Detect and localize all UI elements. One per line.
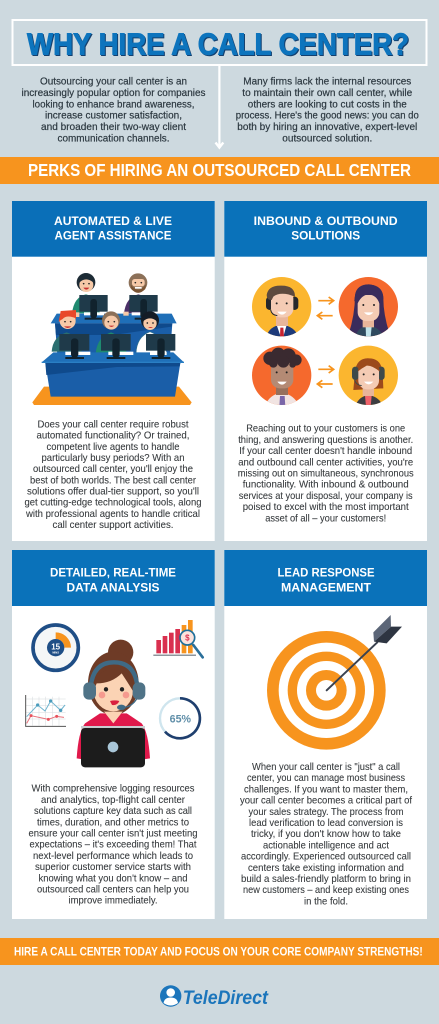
back-row agents [72,273,153,313]
avatar: man with curly hair [252,346,311,407]
back desk [51,312,177,355]
back monitors [76,295,158,320]
panel body text: expectations – it's exceeding them! That [30,839,197,851]
panel body text: and outbound call center activities, you're [238,456,413,468]
panel body text: knowing what you don't know – and [38,872,188,884]
panel body text: missing out on simultaneous, synchronous [238,468,414,480]
panel body text: thing, and answering questions is another. [238,434,413,446]
icon: bar chart with magnifier [153,620,203,657]
intro text left: communication channels. [58,132,170,144]
panel body text: in the fold. [304,895,348,907]
panel body text: improve immediately. [68,895,158,907]
panel body text: outsourced call centers can help you [37,884,189,896]
intro text right: Many firms lack the internal resources [243,76,411,88]
icon: bar chart with magnifier: $ [185,633,190,642]
panel body text: call center support activities. [52,519,174,531]
panel body text: next-level performance which leads to [33,850,193,862]
intro text left: Outsourcing your call center is an [40,76,187,88]
dart [327,615,402,690]
panel body text: superior customer service starts with [35,861,191,873]
panel heading: DETAILED, REAL-TIME [50,566,176,580]
panel body text: tricky, if you don't know how to take [251,828,401,840]
panel body text: ensure your call center isn't just meeting [28,828,198,840]
logo: TeleDirect: TeleDirect [183,987,269,1009]
agent woman with headset and laptop [77,640,150,767]
intro text left [22,76,206,144]
icon: 65 percent donut: 65% [170,713,192,725]
panel body text: solutions offer dual-tier support, so you'll [27,486,199,498]
panel body text: lead verification to lead conversion is [249,817,403,829]
icon: line chart [26,695,66,726]
panel: inbound and outbound solutions [224,201,427,541]
icon: 15 minute clock: MINS [52,650,59,654]
panel heading: DATA ANALYSIS [66,581,160,595]
panel body text: your sales strategy. The process from [248,806,404,818]
panel body text: times, duration, and other metrics to [37,816,189,828]
panel body text [240,761,412,907]
panel body text: poised to excel with the most important [243,501,409,513]
panel body text: get cutting-edge technological tools, along [24,497,202,509]
panel body text [238,423,414,524]
panel body text: solutions capture key data such as call [34,805,192,817]
illustration: agent with laptop and analytics [26,620,203,767]
panel body text: particularly busy periods? With an [42,452,185,464]
panel body text: When your call center is "just" a call [252,761,400,773]
panel heading: AUTOMATED & LIVE [54,214,172,228]
panel: lead response management [224,550,427,919]
panel heading [12,550,215,606]
panel body text: If your call center doesn't handle inbound [239,445,412,457]
intro text right: process. Here's the good news: you can do [236,110,419,122]
intro text left: looking to enhance brand awareness, [32,98,194,110]
icon: 15 minute clock: 15 [51,643,61,652]
icon: 65 percent donut [160,698,200,738]
panel body text: automated functionality? Or trained, [36,430,190,442]
title: WHY HIRE A CALL CENTER? [28,28,410,62]
panel body text: competent live agents to handle [46,441,180,453]
illustration: four avatars exchanging calls [252,277,398,407]
front-row agents [52,310,167,353]
panel body text: accordingly. Experienced outsourced call [241,851,411,863]
intro text left: increase customer satisfaction, [45,110,182,122]
panel heading: INBOUND & OUTBOUND [254,214,398,228]
arrow: title down to perks banner [216,65,223,148]
intro text right: others are looking to cut costs in the [248,98,407,110]
illustration: call center agents at desks [32,273,192,405]
panel body text: outsourced call center, you'll enjoy the [33,463,193,475]
front desk [42,352,184,397]
panel heading: SOLUTIONS [291,229,360,243]
intro text right [236,76,419,144]
panel body text: new customers – and keep existing ones [243,884,409,896]
panel body text [28,783,198,907]
panel body text: best of both worlds. The best call center [30,474,196,486]
panel body text: centers take existing information and [248,862,404,874]
panel body text: with professional agents to handle critical [25,508,200,520]
front monitors [59,334,175,359]
panel heading: LEAD RESPONSE [278,566,374,580]
panel heading: MANAGEMENT [281,581,372,595]
illustration: target with dart [267,615,402,750]
panel heading: AGENT ASSISTANCE [54,229,172,243]
intro text left: and broaden their two-way client [41,121,186,133]
panel body text: actionable intelligence and act [263,839,389,851]
avatar: woman with long hair [339,277,398,337]
panel heading [12,201,215,257]
panel heading [224,201,427,257]
banner: perks heading [0,157,439,184]
panel: automated and live agent assistance [12,201,215,541]
intro text left: increasingly popular option for companies [22,87,206,99]
banner: call to action [0,938,439,965]
intro text right: outsourced solution. [282,132,372,144]
panel body text: services at your disposal, your company is [239,490,413,502]
panel body text: With comprehensive logging resources [32,783,194,795]
panel body text: your call center becomes a critical part of [240,795,412,807]
intro text right: to maintain their own call center, while [242,87,412,99]
target rings [267,631,386,750]
logo: TeleDirect [160,985,269,1009]
panel body text: Does your call center require robust [38,418,189,430]
panel body text: Reaching out to your customers is one [246,423,405,435]
panel body text: build a sales-friendly platform to bring in [241,873,411,885]
panel body text: asset of all – your customers! [265,512,386,524]
panel body text [24,418,202,531]
panel heading [224,550,427,606]
avatar: man with headset [252,277,311,337]
panel body text: challenges. If you want to master them, [244,783,408,795]
title: WHY HIRE A CALL CENTER? [27,28,409,62]
panel body text: and analytics, top-flight call center [41,794,185,806]
arrows between avatars [317,297,334,388]
intro text right: both by hiring an innovative, expert-level [237,121,417,133]
panel body text: center, you can manage most business [247,772,405,784]
panel: detailed real-time data analysis [12,550,215,919]
panel body text: functionality. With inbound & outbound [243,479,409,491]
icon: 15 minute clock [33,625,78,670]
avatar: woman with headset [339,346,398,407]
